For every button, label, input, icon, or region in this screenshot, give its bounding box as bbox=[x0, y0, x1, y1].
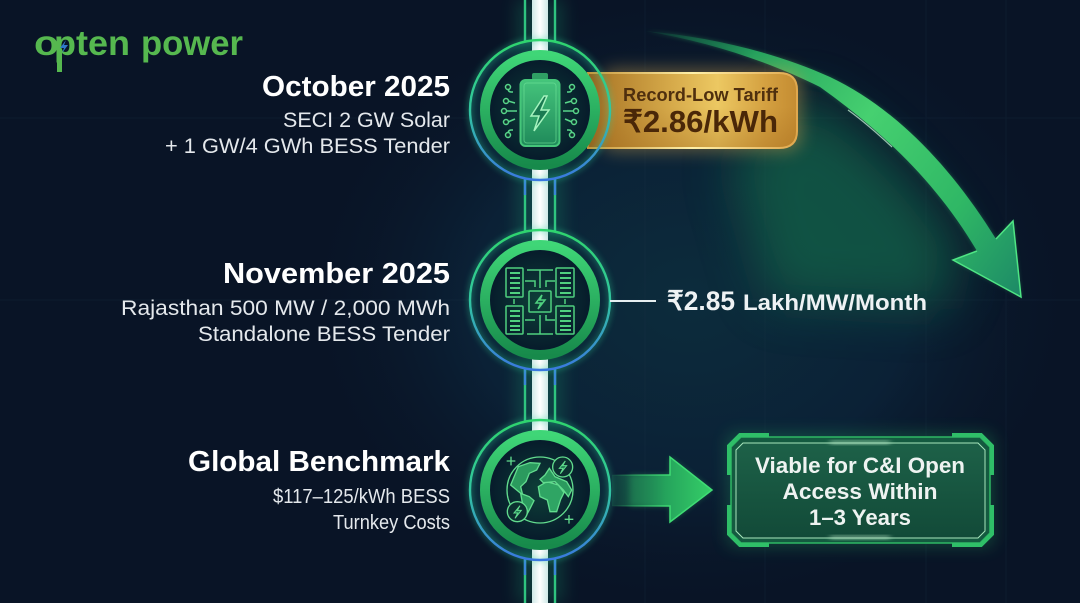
logo: power bbox=[141, 24, 243, 63]
value: lakh per MW per month: Lakh/MW/Month bbox=[743, 290, 927, 315]
value: lakh per MW per month bbox=[667, 286, 927, 316]
milestone text: November 2025: Standalone BESS Tender bbox=[198, 322, 450, 346]
milestone text: Global Benchmark: Global Benchmark bbox=[188, 446, 451, 478]
value: lakh per MW per month: ₹2.85 bbox=[667, 286, 735, 316]
timeline spine bbox=[516, 0, 564, 603]
callout: viable for C&I bbox=[727, 433, 994, 547]
milestone text: Global Benchmark bbox=[188, 446, 451, 534]
callout: viable for C&I: Access Within bbox=[782, 479, 938, 504]
milestone text: November 2025 bbox=[121, 258, 450, 346]
callout: viable for C&I: 1–3 Years bbox=[809, 505, 911, 530]
callout: record-low tariff: ₹2.86/kWh bbox=[623, 104, 778, 139]
node 1: battery bbox=[470, 40, 610, 180]
icon: globe with bolts bbox=[507, 457, 573, 524]
milestone text: Global Benchmark: $117–125/kWh BESS bbox=[273, 486, 450, 508]
logo bbox=[34, 24, 243, 72]
milestone text: October 2025: + 1 GW/4 GWh BESS Tender bbox=[165, 134, 450, 158]
logo: pten bbox=[54, 24, 130, 63]
logo: o bbox=[34, 24, 59, 63]
milestone text: November 2025: Rajasthan 500 MW / 2,000 MWh bbox=[121, 296, 450, 320]
milestone text: November 2025: November 2025 bbox=[223, 258, 450, 290]
milestone text: October 2025 bbox=[165, 71, 450, 158]
callout: record-low tariff bbox=[588, 68, 802, 152]
callout: record-low tariff: Record-Low Tariff bbox=[623, 84, 779, 105]
icon: battery with bolt bbox=[502, 73, 578, 146]
milestone text: Global Benchmark: Turnkey Costs bbox=[333, 511, 450, 534]
arrow: to outcome bbox=[612, 457, 712, 522]
arrow: falling price curve bbox=[645, 31, 1021, 297]
ring backing bands bbox=[471, 41, 609, 559]
milestone text: October 2025: SECI 2 GW Solar bbox=[283, 108, 450, 132]
icon: battery racks bbox=[506, 268, 574, 334]
milestone text: October 2025: October 2025 bbox=[262, 71, 450, 103]
curved glow under arrow bbox=[730, 95, 960, 310]
node 3: globe bbox=[470, 420, 610, 560]
node 2: storage racks bbox=[470, 230, 610, 370]
callout: viable for C&I: Viable for C&I Open bbox=[755, 453, 965, 478]
connector line bbox=[610, 300, 656, 302]
